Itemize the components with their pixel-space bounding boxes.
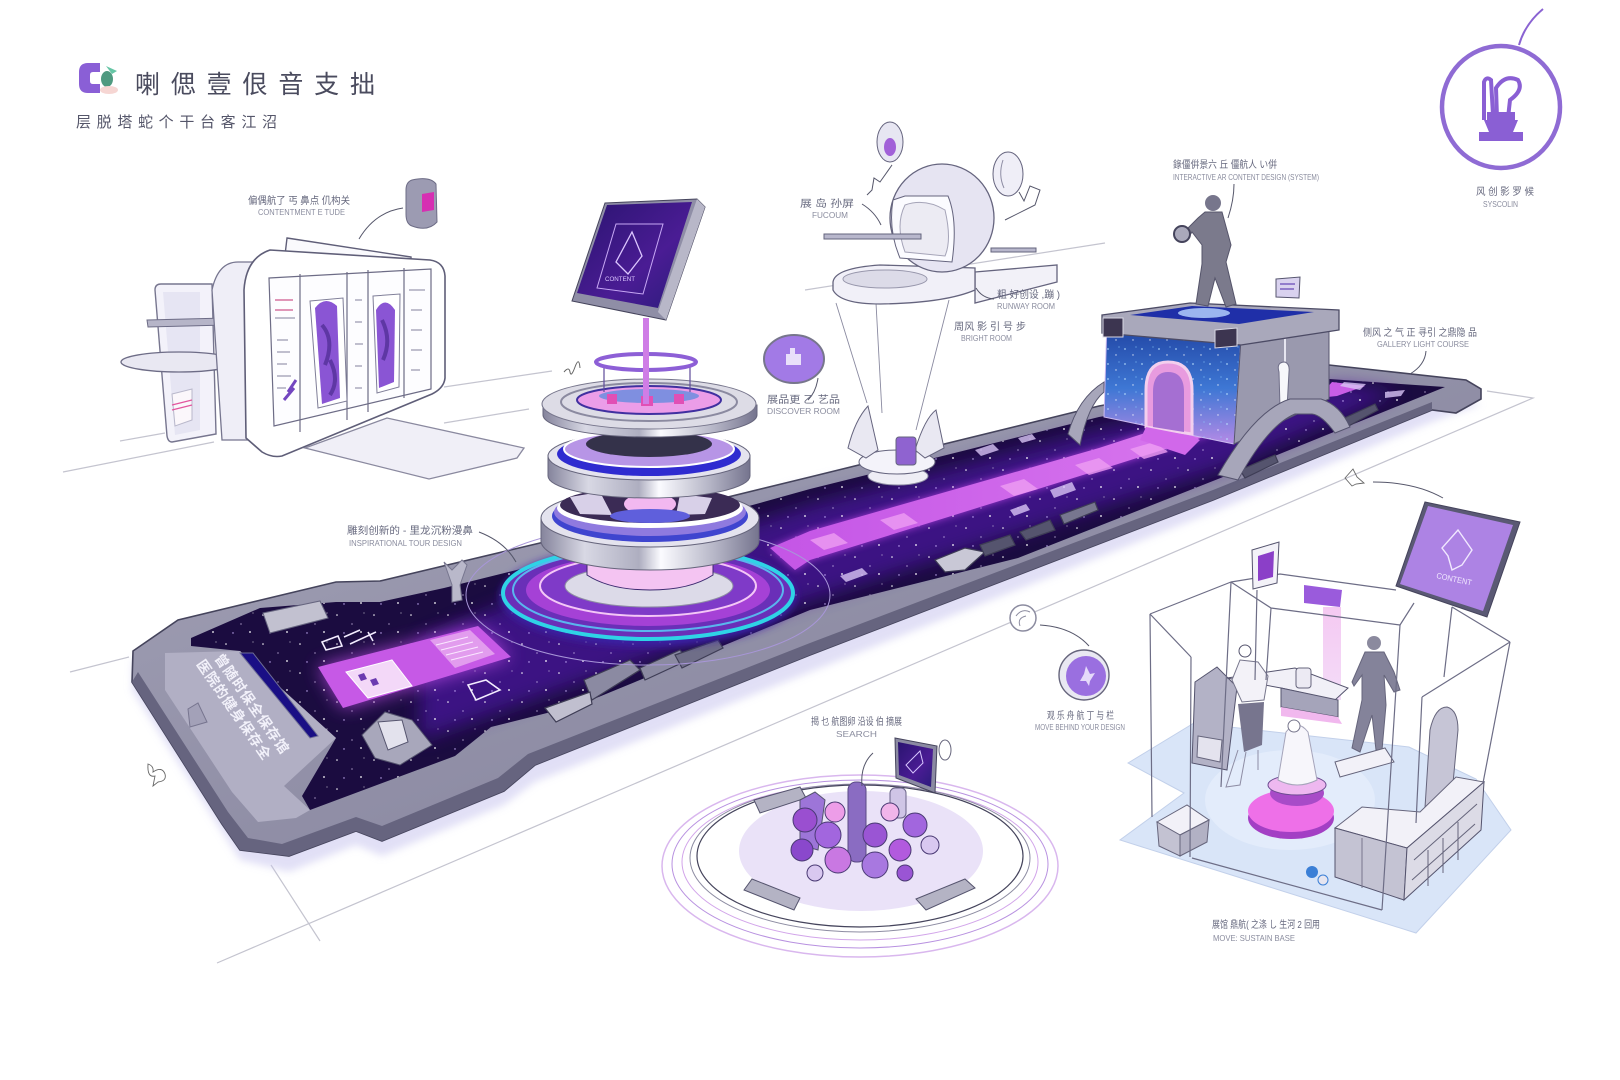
sphere bbox=[890, 164, 994, 272]
label: badge: DISCOVER ROOM bbox=[767, 406, 840, 416]
left control panel bbox=[165, 651, 336, 822]
rail hardware lower bbox=[545, 404, 1378, 722]
left control panel: 曾随时保全保存馆 bbox=[212, 651, 292, 756]
label: beam: 周风 影 引 号 步 bbox=[954, 321, 1026, 333]
purple window 2 bbox=[373, 294, 400, 393]
label: medallion: 风 创 影 罗 候 bbox=[1476, 185, 1534, 198]
panel: floating sphere projector bbox=[824, 122, 1057, 485]
foot chamber bbox=[587, 560, 713, 590]
poster bbox=[1304, 585, 1342, 607]
floor bbox=[1120, 723, 1511, 933]
small sign bbox=[1252, 542, 1279, 589]
small device bbox=[362, 712, 432, 765]
sign on pole: CONTENT bbox=[605, 277, 635, 283]
white statue base bbox=[848, 406, 944, 485]
panel: exhibit circle lower center bbox=[662, 738, 1058, 957]
panel: stacked tower bbox=[541, 199, 759, 590]
wall cabinet left bbox=[1192, 667, 1237, 770]
dark space floor bbox=[191, 379, 1445, 810]
label: building bbox=[1363, 326, 1477, 374]
label: button: MOVE BEHIND YOUR DESIGN bbox=[1035, 722, 1125, 732]
label: booth: 展馆 鼎航( 之涤 し 生河 2 回用 bbox=[1212, 918, 1320, 931]
roof frame bbox=[1102, 303, 1339, 345]
panel: stage building bbox=[1068, 303, 1350, 480]
label: tower: INSPIRATIONAL TOUR DESIGN bbox=[349, 538, 462, 548]
block on rail bbox=[263, 601, 328, 633]
panel: left info kiosk bbox=[121, 238, 524, 479]
lower ring with glass bbox=[541, 487, 759, 570]
back shelf unit bbox=[121, 284, 237, 442]
label: badge bbox=[767, 394, 840, 416]
top plate bbox=[542, 379, 757, 437]
small sign on roof bbox=[1276, 277, 1300, 298]
label: booth bbox=[1212, 918, 1320, 943]
label: tower: 雕刻创新的 - 里龙沉粉漫鼻 bbox=[347, 524, 473, 537]
label: medallion bbox=[1476, 185, 1534, 209]
label: button bbox=[1035, 709, 1125, 732]
projection beams bbox=[836, 300, 949, 430]
icon: sketch mark right bbox=[1345, 469, 1443, 498]
base plate bbox=[305, 418, 524, 479]
middle ring bbox=[548, 431, 750, 498]
toy bbox=[1306, 866, 1328, 885]
icon: button circle bbox=[1010, 605, 1109, 700]
label: statue: 錄僵倂景六 丘 僵航人 い倂 bbox=[1173, 158, 1277, 171]
label: badge: 展品更 乙 艺品 bbox=[767, 394, 840, 406]
label: kiosk bbox=[248, 194, 350, 217]
grey outer frame bbox=[132, 365, 1481, 856]
pod right bbox=[993, 152, 1023, 196]
label: booth: MOVE: SUSTAIN BASE bbox=[1213, 933, 1295, 943]
label: exhibit circle: 揭 乜 航图卵 沿设 伯 摘展 bbox=[811, 715, 902, 728]
logo bbox=[79, 63, 118, 94]
counter bbox=[1227, 668, 1348, 724]
sign bbox=[895, 738, 951, 793]
basket bbox=[1157, 805, 1209, 856]
blue front wall bbox=[1104, 320, 1241, 455]
title: 喇偲壹佷音支拙 bbox=[135, 71, 375, 99]
glowing info card bbox=[318, 626, 511, 708]
bars bbox=[824, 234, 921, 239]
icon: badge circle bbox=[764, 335, 824, 400]
tall mirror bbox=[1424, 707, 1458, 823]
label: sphere top bbox=[800, 197, 854, 220]
label: building: GALLERY LIGHT COURSE bbox=[1377, 339, 1469, 349]
right arch bbox=[1218, 399, 1350, 480]
light strip bbox=[770, 382, 1365, 570]
panel: main runway platform bbox=[132, 365, 1481, 872]
pink beam bbox=[1323, 607, 1341, 700]
label: exhibit circle: SEARCH bbox=[836, 729, 877, 739]
main body bbox=[244, 250, 445, 456]
sign on pole bbox=[572, 199, 705, 320]
central display bbox=[1248, 720, 1334, 839]
product cluster bbox=[791, 782, 939, 881]
icon: top-right medallion bbox=[1442, 9, 1560, 168]
mannequin left bbox=[1226, 645, 1268, 787]
purple window 1 bbox=[310, 298, 347, 408]
panel: glowing ring base bbox=[466, 525, 830, 665]
label: statue: INTERACTIVE AR CONTENT DESIGN (SYSTEM) bbox=[1173, 172, 1319, 182]
right cabinet bbox=[1335, 777, 1484, 900]
label: platform bbox=[976, 288, 1060, 311]
label: kiosk: 偏偶航了 丐 鼻点 仉构关 bbox=[248, 194, 350, 207]
icon: wall tag bbox=[359, 179, 437, 239]
floor icons bbox=[322, 630, 500, 700]
label: sphere top: 展 岛 孙屏 bbox=[800, 197, 854, 210]
large sign: CONTENT bbox=[1436, 571, 1473, 587]
label: beam bbox=[954, 321, 1026, 343]
icon: squiggle bbox=[564, 362, 580, 374]
pod left bbox=[877, 122, 903, 162]
modules bbox=[744, 787, 975, 910]
label: medallion: SYSCOLIN bbox=[1483, 199, 1518, 209]
label: exhibit circle bbox=[811, 715, 902, 739]
label: beam: BRIGHT ROOM bbox=[961, 333, 1012, 343]
label: building: 侧风 之 气 正 寻引 之鼎隐 品 bbox=[1363, 326, 1477, 339]
pole bbox=[643, 318, 649, 404]
subtitle: 层脱塔蛇个干台客江沼 bbox=[76, 114, 277, 131]
panel text marks bbox=[275, 290, 425, 388]
small statue on rail bbox=[444, 560, 467, 602]
large sign bbox=[1396, 502, 1520, 617]
label: tower bbox=[347, 524, 516, 562]
panel: glass booth bbox=[1120, 502, 1520, 933]
person right bbox=[1335, 636, 1400, 777]
icon: sketch bee bbox=[148, 764, 165, 786]
upper halo ring bbox=[596, 354, 696, 392]
platform bbox=[975, 265, 1057, 303]
side wall bbox=[1234, 330, 1329, 444]
floor guide lines bbox=[63, 243, 1533, 963]
label: kiosk: CONTENTMENT E TUDE bbox=[258, 207, 345, 217]
scattered floor marks bbox=[840, 382, 1405, 582]
left control panel: 医院的健身保存全 bbox=[194, 657, 274, 762]
statue: figure with ball bbox=[1174, 195, 1236, 307]
label: sphere top: FUCOUM bbox=[812, 210, 848, 220]
label: platform: 粗 好创设 ,蹦 ) bbox=[997, 288, 1060, 301]
label: button: 观 乐 舟 航 丁 与 栏 bbox=[1047, 709, 1114, 722]
label: statue bbox=[1173, 158, 1319, 218]
glass wires bbox=[1150, 574, 1510, 910]
label: platform: RUNWAY ROOM bbox=[997, 301, 1055, 311]
left arch bbox=[1068, 382, 1104, 445]
